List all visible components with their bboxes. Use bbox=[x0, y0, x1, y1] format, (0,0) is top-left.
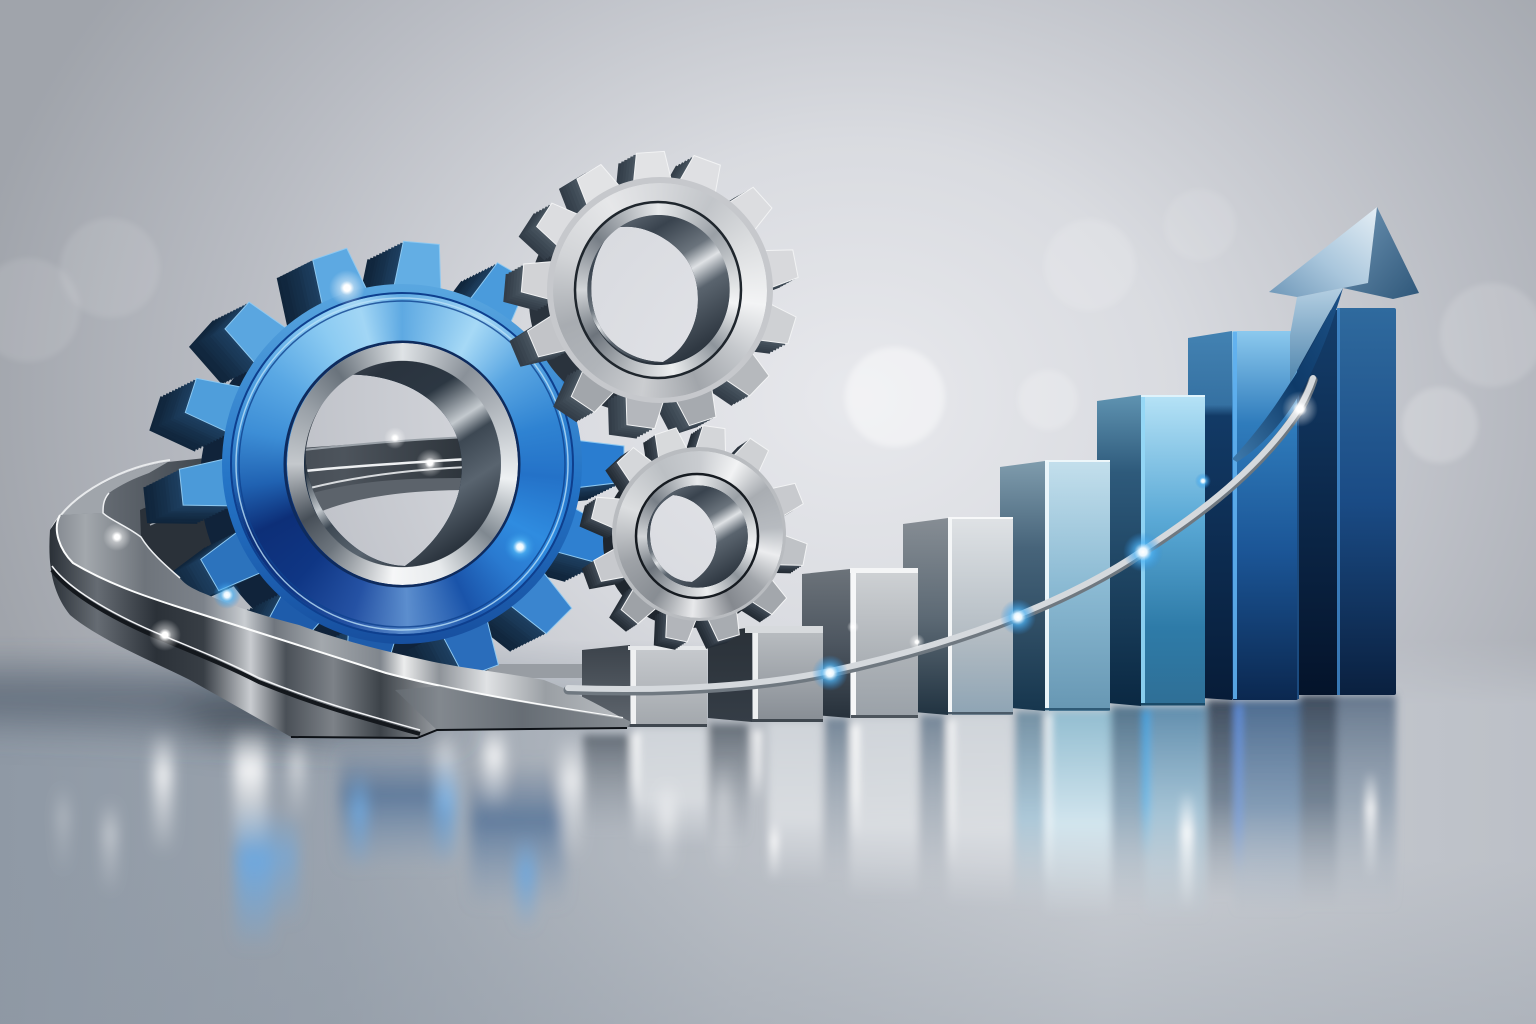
track inner lip highlight bbox=[103, 493, 180, 578]
arrow head right face bbox=[1343, 207, 1419, 299]
track arrow lower facet bbox=[395, 686, 631, 730]
bar 1 bbox=[582, 645, 707, 727]
blue gear depth bbox=[143, 242, 621, 705]
growth curve highlight bbox=[568, 378, 1313, 689]
bar chart bbox=[582, 308, 1396, 727]
small gear face ring bbox=[616, 451, 783, 618]
small gear rim line bbox=[636, 474, 758, 598]
top gear face ring bbox=[553, 183, 767, 398]
top gear depth bbox=[503, 153, 796, 439]
arrow curved underside bbox=[1232, 288, 1343, 462]
bar 3 bbox=[802, 568, 918, 718]
bar 7 bbox=[1188, 331, 1299, 700]
blue gear body bbox=[222, 284, 582, 644]
small gear body bbox=[627, 462, 771, 606]
blue gear teeth bbox=[179, 241, 624, 687]
blue gear bbox=[143, 241, 624, 705]
floor reflections of the track bbox=[58, 725, 730, 950]
blue gear face ring bbox=[232, 294, 572, 634]
reflective floor bbox=[0, 640, 1536, 1024]
track rim highlight bbox=[57, 515, 623, 718]
small gear teeth bbox=[590, 425, 808, 643]
track stub behind the first bar bbox=[480, 664, 584, 678]
top gear rim line bbox=[575, 202, 741, 378]
top silver gear bbox=[503, 151, 799, 439]
blue gear inner tunnel bbox=[305, 358, 501, 570]
track base contact line bbox=[291, 728, 627, 738]
bar 5 bbox=[1000, 460, 1110, 711]
small gear bore ring bbox=[637, 475, 758, 598]
top gear tunnel bbox=[586, 211, 732, 363]
small gear tunnel bbox=[646, 483, 750, 589]
arrow head left face bbox=[1269, 207, 1377, 297]
shadow under the track bbox=[0, 672, 470, 738]
glints bbox=[103, 270, 1318, 691]
track groove bbox=[52, 570, 420, 734]
blue gear rim lines bbox=[231, 293, 573, 635]
rising arrow bbox=[568, 207, 1419, 691]
small silver gear bbox=[578, 425, 808, 651]
top gear bore ring bbox=[575, 202, 742, 378]
growth curve bbox=[568, 380, 1313, 691]
track: back loop behind the gear bbox=[52, 436, 470, 590]
floor reflections of the bars bbox=[583, 695, 1396, 921]
arrow shaft bbox=[1290, 288, 1343, 383]
track underside bbox=[49, 515, 631, 738]
blue gear silver bore ring bbox=[287, 343, 518, 585]
top gear body bbox=[565, 195, 755, 385]
bokeh lights bbox=[0, 189, 1536, 463]
bar 2 bbox=[708, 626, 823, 722]
track: front sweep with arrow tip bbox=[49, 493, 631, 738]
bar 6 bbox=[1097, 395, 1205, 706]
small gear depth bbox=[578, 426, 806, 651]
track groove highlight bbox=[52, 566, 420, 730]
top gear teeth bbox=[521, 151, 799, 429]
bar 4 bbox=[903, 517, 1013, 715]
bar 8 bbox=[1298, 308, 1396, 695]
track top face bbox=[57, 513, 629, 722]
